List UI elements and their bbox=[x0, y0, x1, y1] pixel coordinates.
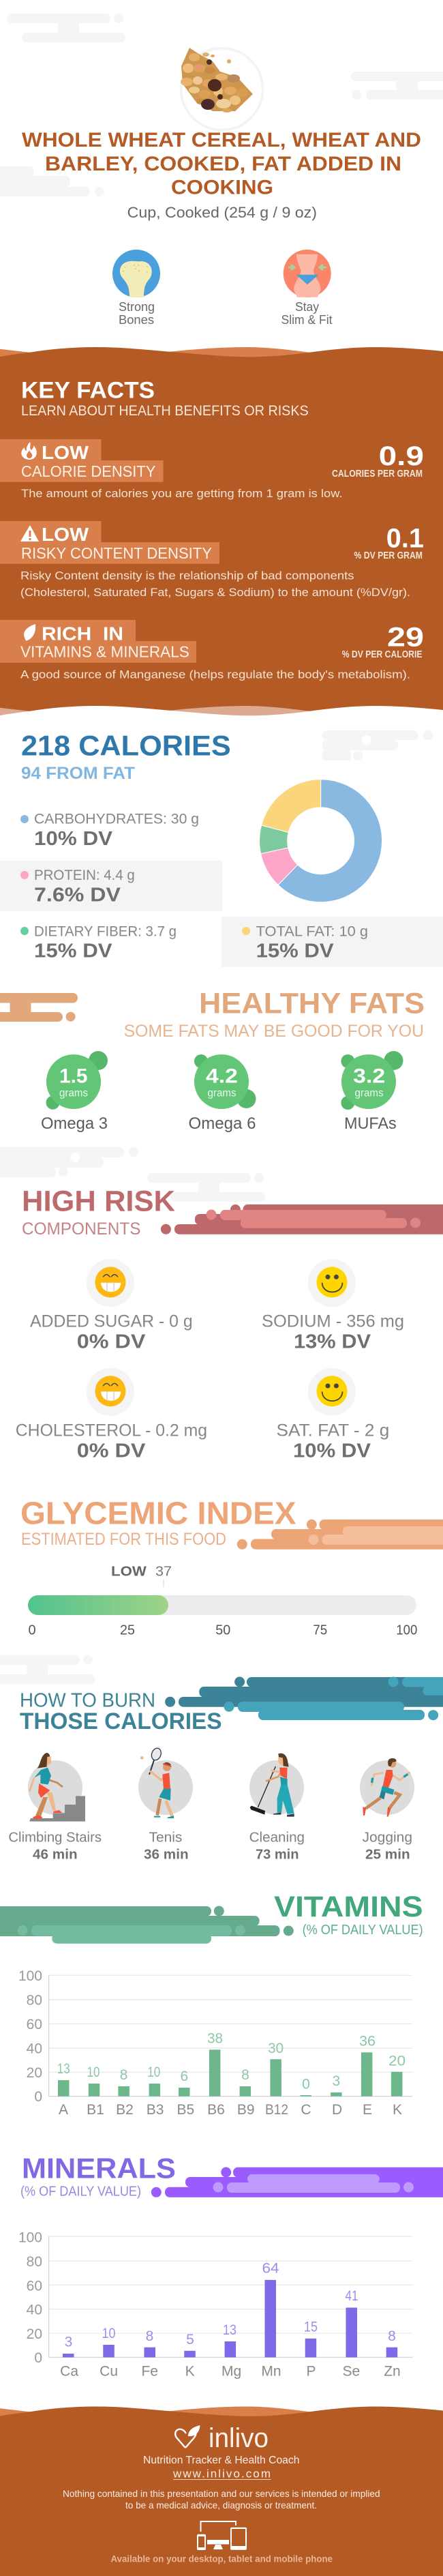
bar chart: minerals bbox=[18, 2230, 412, 2380]
key facts subheading: LEARN ABOUT HEALTH BENEFITS OR RISKS bbox=[21, 403, 309, 419]
healthy fat: omega 3: grams bbox=[59, 1088, 88, 1099]
activity: cleaning: Cleaning bbox=[249, 1831, 305, 1846]
label: stay slim and fit: Slim & Fit bbox=[281, 313, 333, 327]
legend: protein: PROTEIN: 4.4 g bbox=[34, 868, 135, 883]
healthy fats subheading: SOME FATS MAY BE GOOD FOR YOU bbox=[124, 1022, 424, 1041]
icon: strong bones bbox=[112, 250, 160, 297]
bar chart: minerals: 41 bbox=[345, 2288, 358, 2304]
fact: risky content density: (Cholesterol, Saturated Fat, Sugars & Sodium) to the amount (%DV/gr). bbox=[20, 586, 410, 599]
fact: calorie density: LOW bbox=[42, 442, 89, 463]
bar chart: vitamins bbox=[18, 1968, 412, 2118]
activity: tennis bbox=[138, 1747, 193, 1863]
icon: devices bbox=[197, 2521, 247, 2550]
calories from fat: 94 FROM FAT bbox=[21, 764, 135, 783]
fact: risky content density: % DV PER GRAM bbox=[354, 550, 423, 561]
fact: calorie density bbox=[0, 439, 424, 500]
decorative bars: minerals bbox=[151, 2167, 443, 2197]
glycemic index gauge: LOW bbox=[111, 1565, 147, 1580]
vitamins subheading: (% OF DAILY VALUE) bbox=[303, 1923, 423, 1938]
activity: jogging: 25 min bbox=[365, 1848, 410, 1863]
bar chart: vitamins: 20 bbox=[388, 2053, 406, 2069]
risk: added sugar bbox=[30, 1259, 193, 1353]
legend: total fat: 15% DV bbox=[256, 940, 334, 962]
risk: cholesterol: 0% DV bbox=[77, 1440, 146, 1462]
donut chart bbox=[260, 780, 382, 902]
calories heading: 218 CALORIES bbox=[21, 730, 231, 761]
healthy fat: mufas: MUFAs bbox=[344, 1114, 397, 1133]
activity: jogging: Jogging bbox=[363, 1831, 412, 1846]
bar chart: minerals: 5 bbox=[186, 2332, 194, 2348]
bar chart: minerals: 20 bbox=[27, 2326, 42, 2342]
bar chart: minerals: P bbox=[306, 2364, 316, 2380]
legend: total fat bbox=[222, 917, 443, 967]
risk: added sugar: ADDED SUGAR - 0 g bbox=[30, 1312, 193, 1331]
bar chart: minerals: Se bbox=[342, 2364, 360, 2380]
label: strong bones bbox=[119, 300, 155, 327]
key facts heading: KEY FACTS bbox=[21, 378, 155, 404]
icon: flame bbox=[21, 442, 37, 460]
bar chart: minerals: Ca bbox=[60, 2364, 78, 2380]
legend: carbohydrates: CARBOHYDRATES: 30 g bbox=[34, 812, 199, 827]
legend: carbohydrates bbox=[20, 812, 199, 850]
icon: slim and fit bbox=[284, 250, 331, 297]
fact: rich in vitamins and minerals: % DV PER CALORIE bbox=[342, 649, 423, 660]
legend: dietary fiber: 15% DV bbox=[34, 940, 112, 962]
bar chart: vitamins: K bbox=[393, 2102, 402, 2118]
glycemic index gauge: 75 bbox=[313, 1623, 327, 1638]
bar chart: vitamins: 10 bbox=[87, 2064, 100, 2080]
glycemic index gauge: 25 bbox=[120, 1623, 135, 1638]
legend: dietary fiber: DIETARY FIBER: 3.7 g bbox=[34, 923, 177, 939]
activity: tennis: Tenis bbox=[149, 1831, 182, 1846]
website link: www.inlivo.com bbox=[172, 2467, 271, 2480]
bar chart: minerals: Fe bbox=[141, 2364, 158, 2380]
healthy fat: omega 3: 1.5 bbox=[59, 1065, 87, 1088]
glycemic index gauge: 37 bbox=[155, 1565, 172, 1580]
title: BARLEY, COOKED, FAT ADDED IN bbox=[45, 153, 401, 175]
risk: sodium: SODIUM - 356 mg bbox=[262, 1312, 404, 1331]
fact: risky content density: RISKY CONTENT DENSITY bbox=[21, 544, 212, 562]
risk: added sugar: 0% DV bbox=[77, 1331, 146, 1353]
tagline: Nutrition Tracker & Health Coach bbox=[143, 2455, 300, 2466]
bar chart: vitamins: B1 bbox=[87, 2102, 104, 2118]
glycemic index subheading: ESTIMATED FOR THIS FOOD bbox=[21, 1530, 226, 1549]
bar chart: vitamins: 13 bbox=[57, 2061, 70, 2077]
bar chart: minerals: 80 bbox=[27, 2254, 42, 2270]
bar chart: minerals: Cu bbox=[100, 2364, 118, 2380]
bar chart: vitamins: 60 bbox=[27, 2017, 42, 2032]
risk: cholesterol: CHOLESTEROL - 0.2 mg bbox=[16, 1421, 207, 1440]
bar chart: vitamins: B6 bbox=[207, 2102, 225, 2118]
legend: dietary fiber bbox=[20, 923, 177, 962]
label: stay slim and fit: Stay bbox=[295, 300, 319, 314]
fact: risky content density bbox=[0, 521, 424, 599]
bar chart: vitamins: B12 bbox=[265, 2102, 288, 2118]
disclaimer: to be a medical advice, diagnosis or treatment. bbox=[125, 2500, 317, 2511]
bar chart: minerals: 100 bbox=[18, 2230, 42, 2245]
decorative bars: healthy fats bbox=[0, 993, 78, 1022]
bar chart: vitamins: 30 bbox=[268, 2041, 284, 2056]
bar chart: vitamins: B9 bbox=[237, 2102, 255, 2118]
high risk subheading: COMPONENTS bbox=[22, 1219, 140, 1239]
risk: saturated fat bbox=[277, 1368, 389, 1462]
background cloud: calories bbox=[322, 730, 433, 760]
bar chart: minerals: 64 bbox=[262, 2260, 279, 2276]
healthy fat: mufas: grams bbox=[354, 1088, 383, 1099]
decorative bars: vitamins bbox=[0, 1906, 294, 1944]
activity: tennis: 36 min bbox=[144, 1848, 189, 1863]
high risk heading: HIGH RISK bbox=[22, 1185, 175, 1218]
risk: saturated fat: SAT. FAT - 2 g bbox=[277, 1421, 389, 1440]
bar chart: minerals: 40 bbox=[27, 2303, 42, 2318]
bar chart: vitamins: B2 bbox=[116, 2102, 134, 2118]
disclaimer bbox=[63, 2488, 380, 2511]
bar chart: vitamins: 8 bbox=[241, 2067, 249, 2083]
icon: warning triangle bbox=[20, 525, 39, 542]
fact: rich in vitamins and minerals: RICH IN bbox=[42, 623, 123, 644]
burn calories heading: HOW TO BURN bbox=[20, 1690, 155, 1712]
fact: rich in vitamins and minerals: VITAMINS & MINERALS bbox=[20, 642, 189, 660]
bar chart: vitamins: B5 bbox=[177, 2102, 194, 2118]
bar chart: minerals: 8 bbox=[388, 2328, 396, 2344]
glycemic index gauge: 50 bbox=[215, 1623, 230, 1638]
bar chart: vitamins: 3 bbox=[333, 2073, 340, 2089]
fact: calorie density: CALORIES PER GRAM bbox=[332, 469, 423, 479]
fact: rich in vitamins and minerals bbox=[0, 620, 424, 681]
background clouds: high risk bbox=[0, 1147, 265, 1202]
bar chart: vitamins: 100 bbox=[18, 1968, 42, 1984]
decorative bars: high risk bbox=[161, 1204, 443, 1234]
legend: carbohydrates: 10% DV bbox=[34, 828, 113, 850]
serving size subtitle: Cup, Cooked (254 g / 9 oz) bbox=[127, 204, 317, 221]
healthy fat: omega 3: Omega 3 bbox=[41, 1114, 108, 1133]
legend: protein bbox=[0, 861, 222, 911]
activity: climbing stairs bbox=[8, 1753, 102, 1863]
bar chart: minerals: 10 bbox=[102, 2326, 116, 2341]
bar chart: minerals: Zn bbox=[384, 2364, 401, 2380]
vitamins heading: VITAMINS bbox=[274, 1891, 423, 1923]
bar chart: vitamins: B3 bbox=[147, 2102, 164, 2118]
risk: saturated fat: 10% DV bbox=[293, 1440, 371, 1462]
bar chart: vitamins: 36 bbox=[359, 2033, 376, 2049]
fact: calorie density: The amount of calories you are getting from 1 gram is low. bbox=[21, 487, 343, 500]
healthy fat: mufas bbox=[341, 1051, 403, 1133]
food image: granola cereal in circle bbox=[181, 48, 263, 130]
healthy fat: omega 6: 4.2 bbox=[206, 1065, 238, 1088]
healthy fat: omega 6: Omega 6 bbox=[188, 1114, 256, 1133]
minerals subheading: (% OF DAILY VALUE) bbox=[20, 2184, 141, 2199]
activity: jogging bbox=[360, 1758, 414, 1863]
bar chart: vitamins: C bbox=[301, 2102, 311, 2118]
healthy fat: omega 3 bbox=[41, 1051, 108, 1133]
availability note: Available on your desktop, tablet and mobile phone bbox=[110, 2553, 333, 2564]
burn calories heading: THOSE CALORIES bbox=[20, 1708, 222, 1734]
label: strong bones: Bones bbox=[119, 313, 154, 327]
fact: risky content density: Risky Content density is the relationship of bad components bbox=[20, 569, 354, 582]
bar chart: vitamins: A bbox=[59, 2102, 68, 2118]
bar chart: minerals: 8 bbox=[146, 2328, 153, 2344]
bar chart: vitamins: D bbox=[332, 2102, 342, 2118]
disclaimer: Nothing contained in this presentation and our services is intended or implied bbox=[63, 2488, 380, 2499]
risk: sodium bbox=[262, 1259, 404, 1353]
legend: total fat: TOTAL FAT: 10 g bbox=[256, 923, 368, 939]
panel: footer bbox=[0, 2406, 443, 2576]
bar chart: vitamins: 0 bbox=[34, 2089, 42, 2105]
activity: cleaning: 73 min bbox=[256, 1848, 299, 1863]
glycemic index gauge: 100 bbox=[396, 1623, 417, 1638]
bar chart: vitamins: 0 bbox=[302, 2077, 310, 2092]
background cloud: burn calories bbox=[0, 1655, 95, 1684]
minerals heading: MINERALS bbox=[22, 2152, 176, 2184]
activity: cleaning bbox=[249, 1753, 305, 1863]
bar chart: minerals: Mg bbox=[222, 2364, 241, 2380]
top wave bbox=[0, 347, 309, 361]
bar chart: minerals: 15 bbox=[304, 2320, 318, 2335]
title: COOKING bbox=[171, 176, 273, 199]
risk: sodium: 13% DV bbox=[294, 1331, 371, 1353]
healthy fat: mufas: 3.2 bbox=[353, 1065, 385, 1088]
title: WHOLE WHEAT CEREAL, WHEAT AND bbox=[22, 129, 421, 151]
bottom wave bbox=[0, 706, 309, 720]
background clouds: header bbox=[0, 14, 443, 196]
bar chart: minerals: 60 bbox=[27, 2278, 42, 2294]
bar chart: vitamins: 8 bbox=[120, 2067, 127, 2083]
glycemic index gauge: 0 bbox=[29, 1623, 36, 1638]
healthy fat: omega 6 bbox=[188, 1054, 256, 1133]
activity: climbing stairs: 46 min bbox=[33, 1848, 78, 1863]
bar chart: vitamins: 40 bbox=[27, 2041, 42, 2057]
bar chart: minerals: 13 bbox=[223, 2322, 236, 2338]
fact: rich in vitamins and minerals: A good source of Manganese (helps regulate the body's metabolism). bbox=[20, 668, 410, 681]
fact: calorie density: 0.9 bbox=[379, 441, 424, 471]
label: strong bones: Strong bbox=[119, 300, 155, 314]
bar chart: minerals: 3 bbox=[65, 2334, 72, 2350]
decorative bars: burn calories bbox=[165, 1676, 443, 1720]
fact: calorie density: CALORIE DENSITY bbox=[21, 462, 155, 480]
bar chart: vitamins: 20 bbox=[27, 2065, 42, 2081]
logo: inlivo wordmark: inlivo bbox=[209, 2423, 269, 2453]
icon: leaf bbox=[24, 624, 35, 641]
bar chart: vitamins: 80 bbox=[27, 1993, 42, 2008]
bar chart: vitamins: E bbox=[363, 2102, 372, 2118]
label: stay slim and fit bbox=[281, 300, 333, 327]
fact: risky content density: LOW bbox=[42, 524, 89, 545]
glycemic index gauge bbox=[28, 1565, 417, 1638]
bar chart: vitamins: 10 bbox=[147, 2064, 160, 2080]
bar chart: minerals: Mn bbox=[261, 2364, 281, 2380]
glycemic index heading: GLYCEMIC INDEX bbox=[20, 1495, 296, 1530]
activity: climbing stairs: Climbing Stairs bbox=[8, 1831, 102, 1846]
panel: key facts bbox=[0, 347, 443, 724]
healthy fat: omega 6: grams bbox=[207, 1088, 236, 1099]
logo: heart and leaf bbox=[175, 2425, 200, 2448]
legend: protein: 7.6% DV bbox=[34, 885, 121, 906]
bar chart: minerals: K bbox=[185, 2364, 195, 2380]
risk: cholesterol bbox=[16, 1368, 207, 1462]
title bbox=[22, 129, 421, 199]
bar chart: minerals: 0 bbox=[34, 2350, 42, 2366]
bar chart: vitamins: 38 bbox=[207, 2031, 223, 2047]
fact: rich in vitamins and minerals: 29 bbox=[387, 623, 424, 653]
burn calories heading bbox=[20, 1690, 222, 1734]
decorative bars: glycemic index bbox=[237, 1520, 443, 1550]
bar chart: vitamins: 6 bbox=[180, 2069, 188, 2084]
healthy fats heading: HEALTHY FATS bbox=[199, 988, 425, 1020]
fact: risky content density: 0.1 bbox=[386, 524, 424, 554]
